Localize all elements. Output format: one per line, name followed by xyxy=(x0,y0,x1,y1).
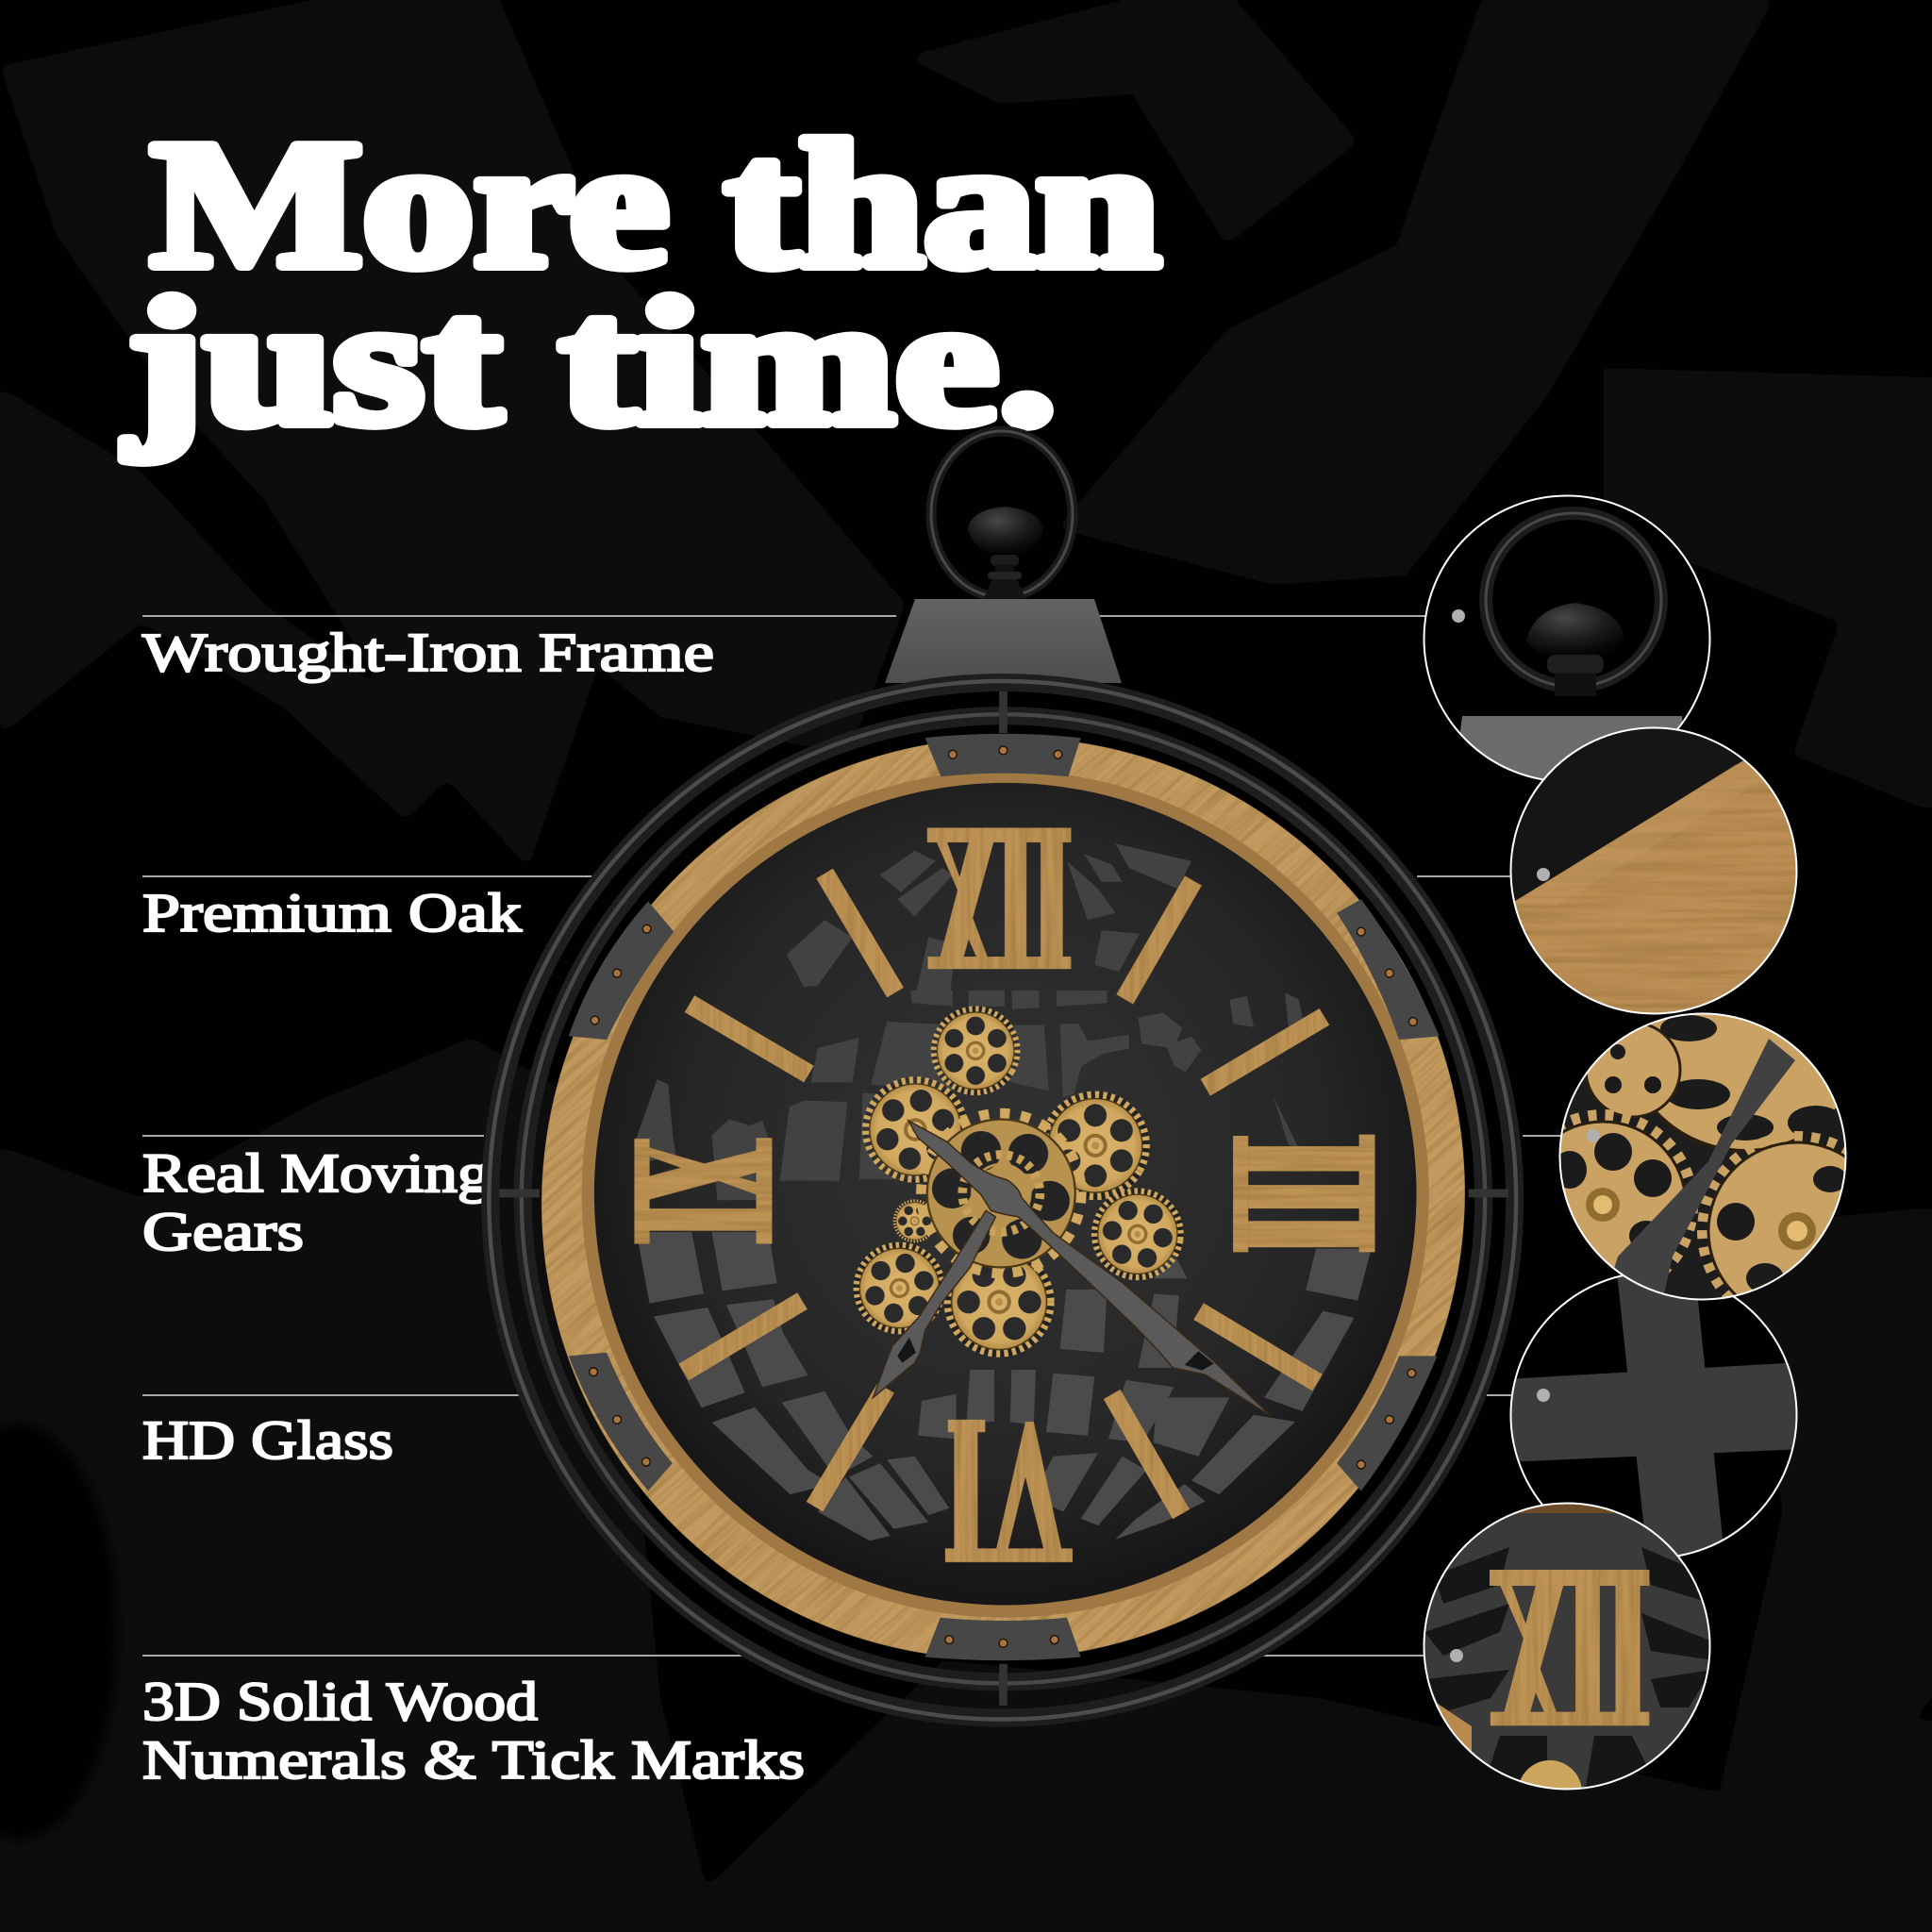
hour hand xyxy=(874,1210,995,1397)
gear: bottom xyxy=(944,1247,1054,1357)
label: real moving gears xyxy=(142,1142,491,1262)
dial glass xyxy=(594,783,1417,1606)
numeral IX xyxy=(634,1138,772,1244)
numeral VI xyxy=(945,1420,1073,1562)
detail circle: frame crown xyxy=(1424,496,1709,792)
detail circle: numeral xyxy=(1423,1502,1711,1790)
label: 3d solid wood numerals and tick marks: Numerals & Tick Marks xyxy=(142,1729,805,1790)
rivets xyxy=(590,746,1417,1647)
tick marks xyxy=(678,869,1329,1519)
gear: small xyxy=(893,1200,936,1242)
crown: knob and stem xyxy=(968,507,1043,600)
label: 3d solid wood numerals and tick marks xyxy=(142,1671,805,1790)
gears xyxy=(835,991,1190,1357)
oak ring xyxy=(352,547,1655,1849)
clock xyxy=(352,431,1655,1849)
callout lines xyxy=(142,616,1593,1656)
detail circle: glass xyxy=(1505,1264,1802,1566)
metal brackets xyxy=(569,734,1440,1660)
gear: upper right xyxy=(1022,1072,1169,1219)
label: real moving gears: Gears xyxy=(142,1201,304,1262)
iron rings xyxy=(489,681,1516,1720)
title: just time. xyxy=(124,261,1057,462)
gear: right xyxy=(1086,1183,1190,1286)
crown: hanging ring xyxy=(931,431,1073,597)
label: 3d solid wood numerals and tick marks: 3D Solid Wood xyxy=(142,1671,538,1732)
minute hand xyxy=(908,1121,1271,1416)
detail circle: oak xyxy=(1509,726,1798,1015)
gear: top xyxy=(915,991,1036,1111)
crown: trapezoid plate xyxy=(885,599,1122,683)
title: More than xyxy=(151,104,1160,305)
label: real moving gears: Real Moving xyxy=(142,1142,491,1204)
gear: upper left xyxy=(841,1056,990,1204)
numeral XII xyxy=(927,828,1071,969)
label: premium oak: Premium Oak xyxy=(142,882,522,943)
numeral III xyxy=(1233,1135,1374,1252)
label: wrought-iron frame: Wrought-Iron Frame xyxy=(142,622,714,683)
detail circle: gears xyxy=(1558,1013,1847,1300)
label: hd glass: HD Glass xyxy=(142,1409,393,1471)
globe map xyxy=(637,843,1372,1541)
gear: lower left xyxy=(835,1224,964,1353)
gear: central plate xyxy=(922,1114,1081,1273)
title xyxy=(124,104,1160,462)
